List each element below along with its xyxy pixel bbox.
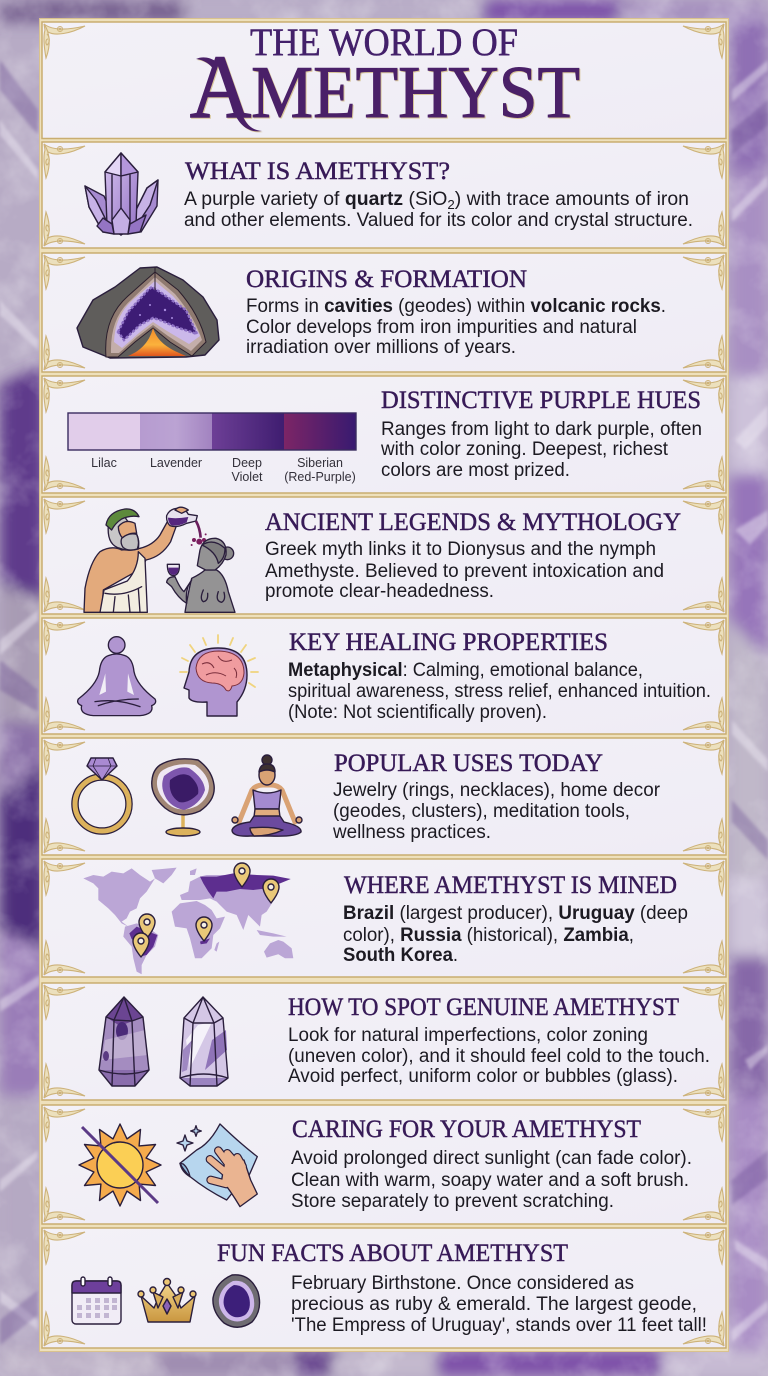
text block bbox=[288, 660, 711, 723]
text block: South Korea. bbox=[343, 945, 458, 966]
panel: fun facts about amethyst bbox=[42, 1228, 726, 1348]
heading: DISTINCTIVE PURPLE HUES bbox=[381, 387, 701, 414]
text block bbox=[288, 1025, 710, 1087]
panel: popular uses today bbox=[42, 738, 726, 855]
colour scale: Siberian bbox=[297, 456, 343, 470]
text block: Ranges from light to dark purple, often bbox=[381, 419, 702, 440]
heading: ANCIENT LEGENDS & MYTHOLOGY bbox=[265, 509, 681, 536]
text block bbox=[332, 780, 661, 843]
text block: February Birthstone. Once considered as bbox=[291, 1273, 634, 1294]
heading: KEY HEALING PROPERTIES bbox=[289, 629, 608, 656]
text block: Jewelry (rings, necklaces), home decor bbox=[333, 780, 661, 801]
icon: meditating figure bbox=[78, 637, 156, 716]
text block: wellness practices. bbox=[332, 822, 491, 843]
panel: title bbox=[42, 21, 726, 138]
icon: crystal cluster bbox=[85, 153, 158, 235]
text block: Avoid perfect, uniform color or bubbles (glass). bbox=[288, 1066, 678, 1087]
text block: Metaphysical: Calming, emotional balance, bbox=[288, 660, 643, 681]
text block: Amethyste. Believed to prevent intoxication and bbox=[265, 561, 664, 582]
text block bbox=[291, 1148, 692, 1212]
colour scale: Deep bbox=[232, 456, 262, 470]
heading: WHAT IS AMETHYST? bbox=[185, 158, 450, 185]
text block: Look for natural imperfections, color zoning bbox=[288, 1025, 648, 1046]
icon: geode slice bbox=[213, 1275, 260, 1327]
heading: FUN FACTS ABOUT AMETHYST bbox=[217, 1240, 568, 1267]
icon: glass imitation crystal bbox=[180, 997, 228, 1086]
icon: crossed-out sun bbox=[79, 1124, 161, 1206]
icon: geode cross-section bbox=[77, 267, 219, 358]
icon: crown bbox=[138, 1278, 196, 1322]
text block: Store separately to prevent scratching. bbox=[291, 1191, 614, 1212]
heading: ORIGINS & FORMATION bbox=[246, 266, 527, 293]
icon: yoga figure bbox=[232, 755, 302, 836]
text block: with trace amounts of iron bbox=[466, 189, 684, 210]
text block: irradiation over millions of years. bbox=[246, 337, 516, 358]
panel: caring for your amethyst bbox=[42, 1105, 726, 1224]
text block: Forms in cavities (geodes) within volcanic rocks. bbox=[246, 296, 666, 317]
heading: POPULAR USES TODAY bbox=[334, 750, 603, 777]
text block: spiritual awareness, stress relief, enhanced intuition. bbox=[288, 681, 711, 702]
text block bbox=[343, 903, 688, 966]
icon: geode on stand bbox=[152, 759, 214, 836]
icon: hand wiping with cloth bbox=[177, 1124, 257, 1207]
text block: ) bbox=[455, 189, 461, 210]
heading: HOW TO SPOT GENUINE AMETHYST bbox=[288, 994, 679, 1021]
text block: color), Russia (historical), Zambia, bbox=[343, 925, 634, 946]
text block: A purple variety of quartz (SiO bbox=[184, 189, 446, 210]
colour scale: (Red-Purple) bbox=[284, 470, 356, 484]
text block: Color develops from iron impurities and natural bbox=[246, 317, 637, 338]
panel: key healing properties bbox=[42, 618, 726, 734]
text block: with color zoning. Deepest, richest bbox=[380, 439, 669, 460]
colour scale bbox=[68, 413, 356, 484]
text block: Greek myth links it to Dionysus and the nymph bbox=[265, 539, 656, 560]
icon: map pins bbox=[133, 863, 279, 957]
text block bbox=[291, 1273, 707, 1336]
colour scale: Lavender bbox=[150, 456, 202, 470]
icon: calendar bbox=[72, 1277, 121, 1324]
icon: gold ring bbox=[75, 758, 129, 831]
text block: precious as ruby & emerald. The largest geode, bbox=[291, 1294, 697, 1315]
text block: Avoid prolonged direct sunlight (can fade color). bbox=[291, 1148, 692, 1169]
text block bbox=[246, 296, 666, 358]
title: amethyst: AMETHYST bbox=[190, 38, 580, 137]
panel: origins and formation bbox=[42, 253, 726, 372]
text block: 'The Empress of Uruguay', stands over 11 feet tall! bbox=[291, 1315, 707, 1336]
text block bbox=[380, 419, 702, 481]
text block: and other elements. Valued for its color and crystal structure. bbox=[184, 210, 693, 231]
panel: distinctive purple hues bbox=[42, 376, 726, 493]
text block: (uneven color), and it should feel cold to the touch. bbox=[288, 1046, 710, 1067]
text block: (Note: Not scientifically proven). bbox=[288, 702, 547, 723]
title: the world of: THE WORLD OF bbox=[250, 21, 518, 64]
heading: CARING FOR YOUR AMETHYST bbox=[292, 1116, 641, 1143]
text block: Clean with warm, soapy water and a soft brush. bbox=[291, 1170, 689, 1191]
text block bbox=[265, 539, 664, 602]
panel: where amethyst is mined bbox=[42, 859, 726, 977]
colour scale: Lilac bbox=[91, 456, 117, 470]
colour scale: Violet bbox=[231, 470, 263, 484]
text block bbox=[184, 189, 693, 231]
world map bbox=[83, 868, 293, 974]
icon: dionysus pouring wine over nymph bbox=[84, 507, 235, 612]
panel: what is amethyst bbox=[42, 142, 726, 248]
icon: head with brain bbox=[180, 635, 258, 716]
text block: (geodes, clusters), meditation tools, bbox=[333, 801, 630, 822]
text block: 2 bbox=[447, 197, 455, 212]
heading: WHERE AMETHYST IS MINED bbox=[344, 872, 677, 899]
text block: colors are most prized. bbox=[381, 460, 570, 481]
icon: natural crystal bbox=[99, 997, 149, 1086]
panel: ancient legends and mythology bbox=[42, 497, 726, 614]
panel: how to spot genuine amethyst bbox=[42, 983, 726, 1100]
text block: promote clear-headedness. bbox=[265, 581, 494, 602]
text block: Brazil (largest producer), Uruguay (deep bbox=[343, 903, 688, 924]
